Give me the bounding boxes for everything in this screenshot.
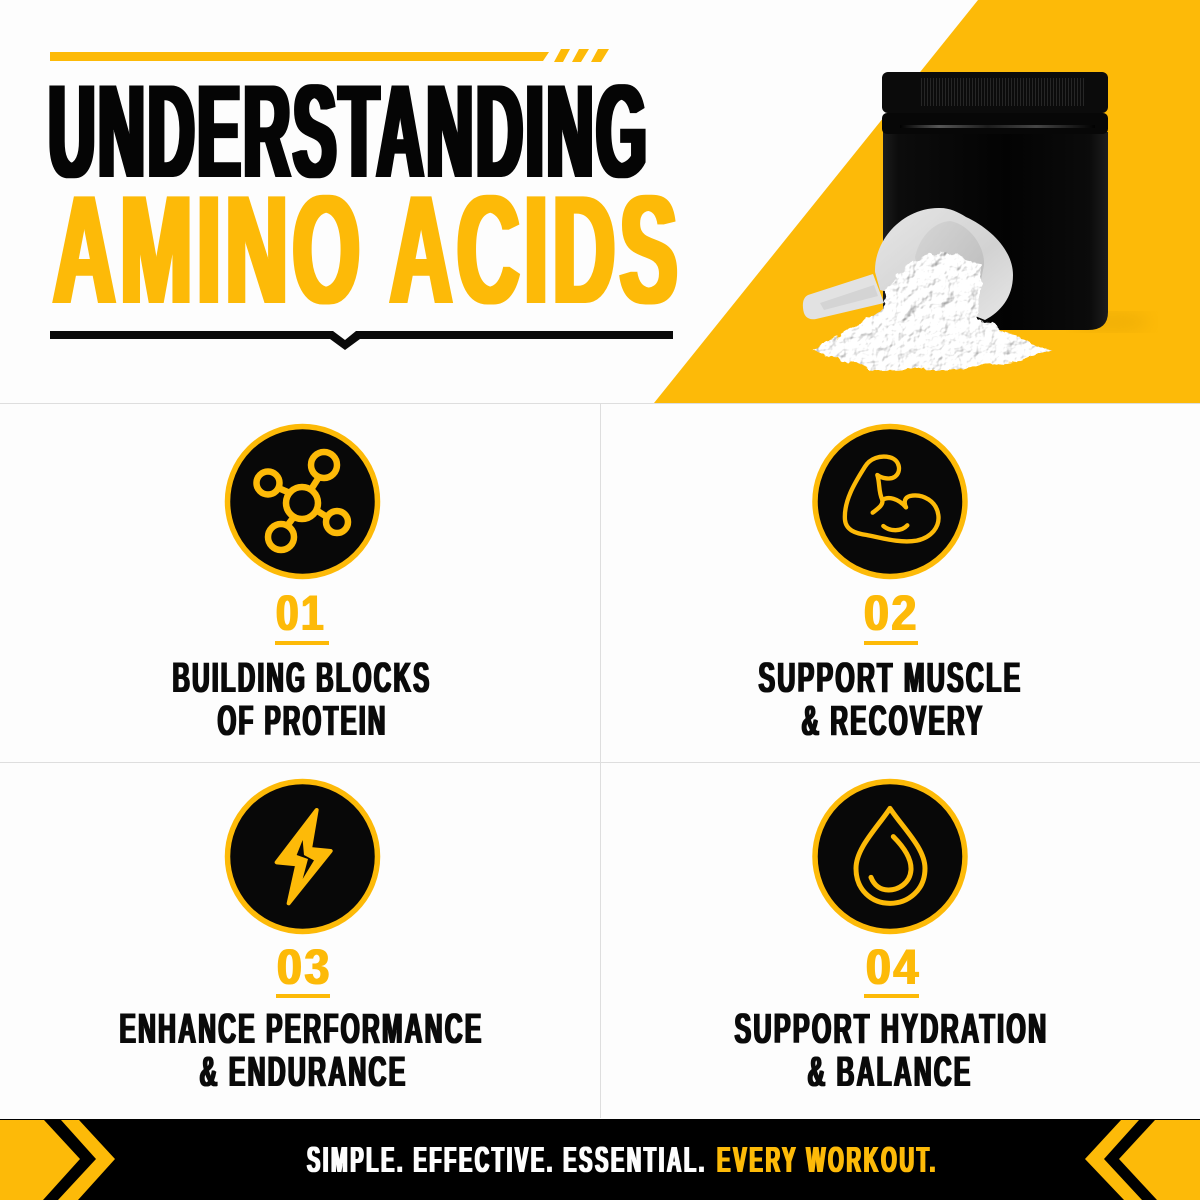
number 02: 02 [864, 585, 919, 641]
label: & RECOVERY [802, 697, 984, 745]
label: BUILDING BLOCKS [172, 654, 432, 702]
icon: molecule [228, 426, 378, 576]
scoop inner [915, 221, 984, 310]
top accent bar [50, 49, 609, 62]
title: AMINO ACIDS [53, 163, 682, 336]
left chevrons [0, 1120, 115, 1200]
number 03: 03 [277, 939, 332, 995]
icon: lightning bolt [228, 782, 378, 932]
grid dividers [0, 403, 1200, 1118]
label: & ENDURANCE [200, 1048, 408, 1096]
number 04: 04 [866, 939, 921, 995]
scoop handle [803, 274, 884, 319]
number underline [275, 641, 329, 645]
icon: water drop [815, 782, 965, 932]
number underline [864, 641, 918, 645]
label: & BALANCE [808, 1048, 972, 1096]
footer background [0, 1119, 1200, 1200]
panel: enhance performance and endurance [120, 782, 499, 1096]
jar neck band [882, 113, 1108, 134]
jar lid [882, 72, 1108, 113]
footer tagline: EVERY WORKOUT. [717, 1139, 938, 1180]
scoop bowl [875, 208, 1013, 320]
number underline [276, 994, 330, 998]
jar band highlight [900, 125, 1095, 128]
panel: building blocks of protein [172, 426, 447, 745]
right chevrons [1085, 1120, 1200, 1200]
panel: support hydration and balance [734, 782, 1064, 1096]
footer tagline: SIMPLE. EFFECTIVE. ESSENTIAL. [307, 1139, 707, 1180]
number 01: 01 [276, 585, 326, 641]
title underline with notch [50, 331, 673, 350]
jar shadow [1074, 313, 1150, 331]
panel: support muscle and recovery [758, 426, 1038, 745]
jar lid ribs [920, 78, 1085, 106]
number underline [864, 994, 919, 998]
jar body [883, 132, 1108, 330]
label: ENHANCE PERFORMANCE [120, 1005, 483, 1053]
label: OF PROTEIN [218, 697, 388, 745]
powder pile [812, 250, 1052, 369]
title [48, 58, 682, 336]
product: jar and scoop with powder [803, 72, 1150, 369]
hero yellow diagonal panel [654, 0, 1200, 403]
icon: flexed arm [815, 426, 965, 576]
footer banner [0, 1119, 1200, 1200]
scoop handle inset [820, 285, 878, 310]
